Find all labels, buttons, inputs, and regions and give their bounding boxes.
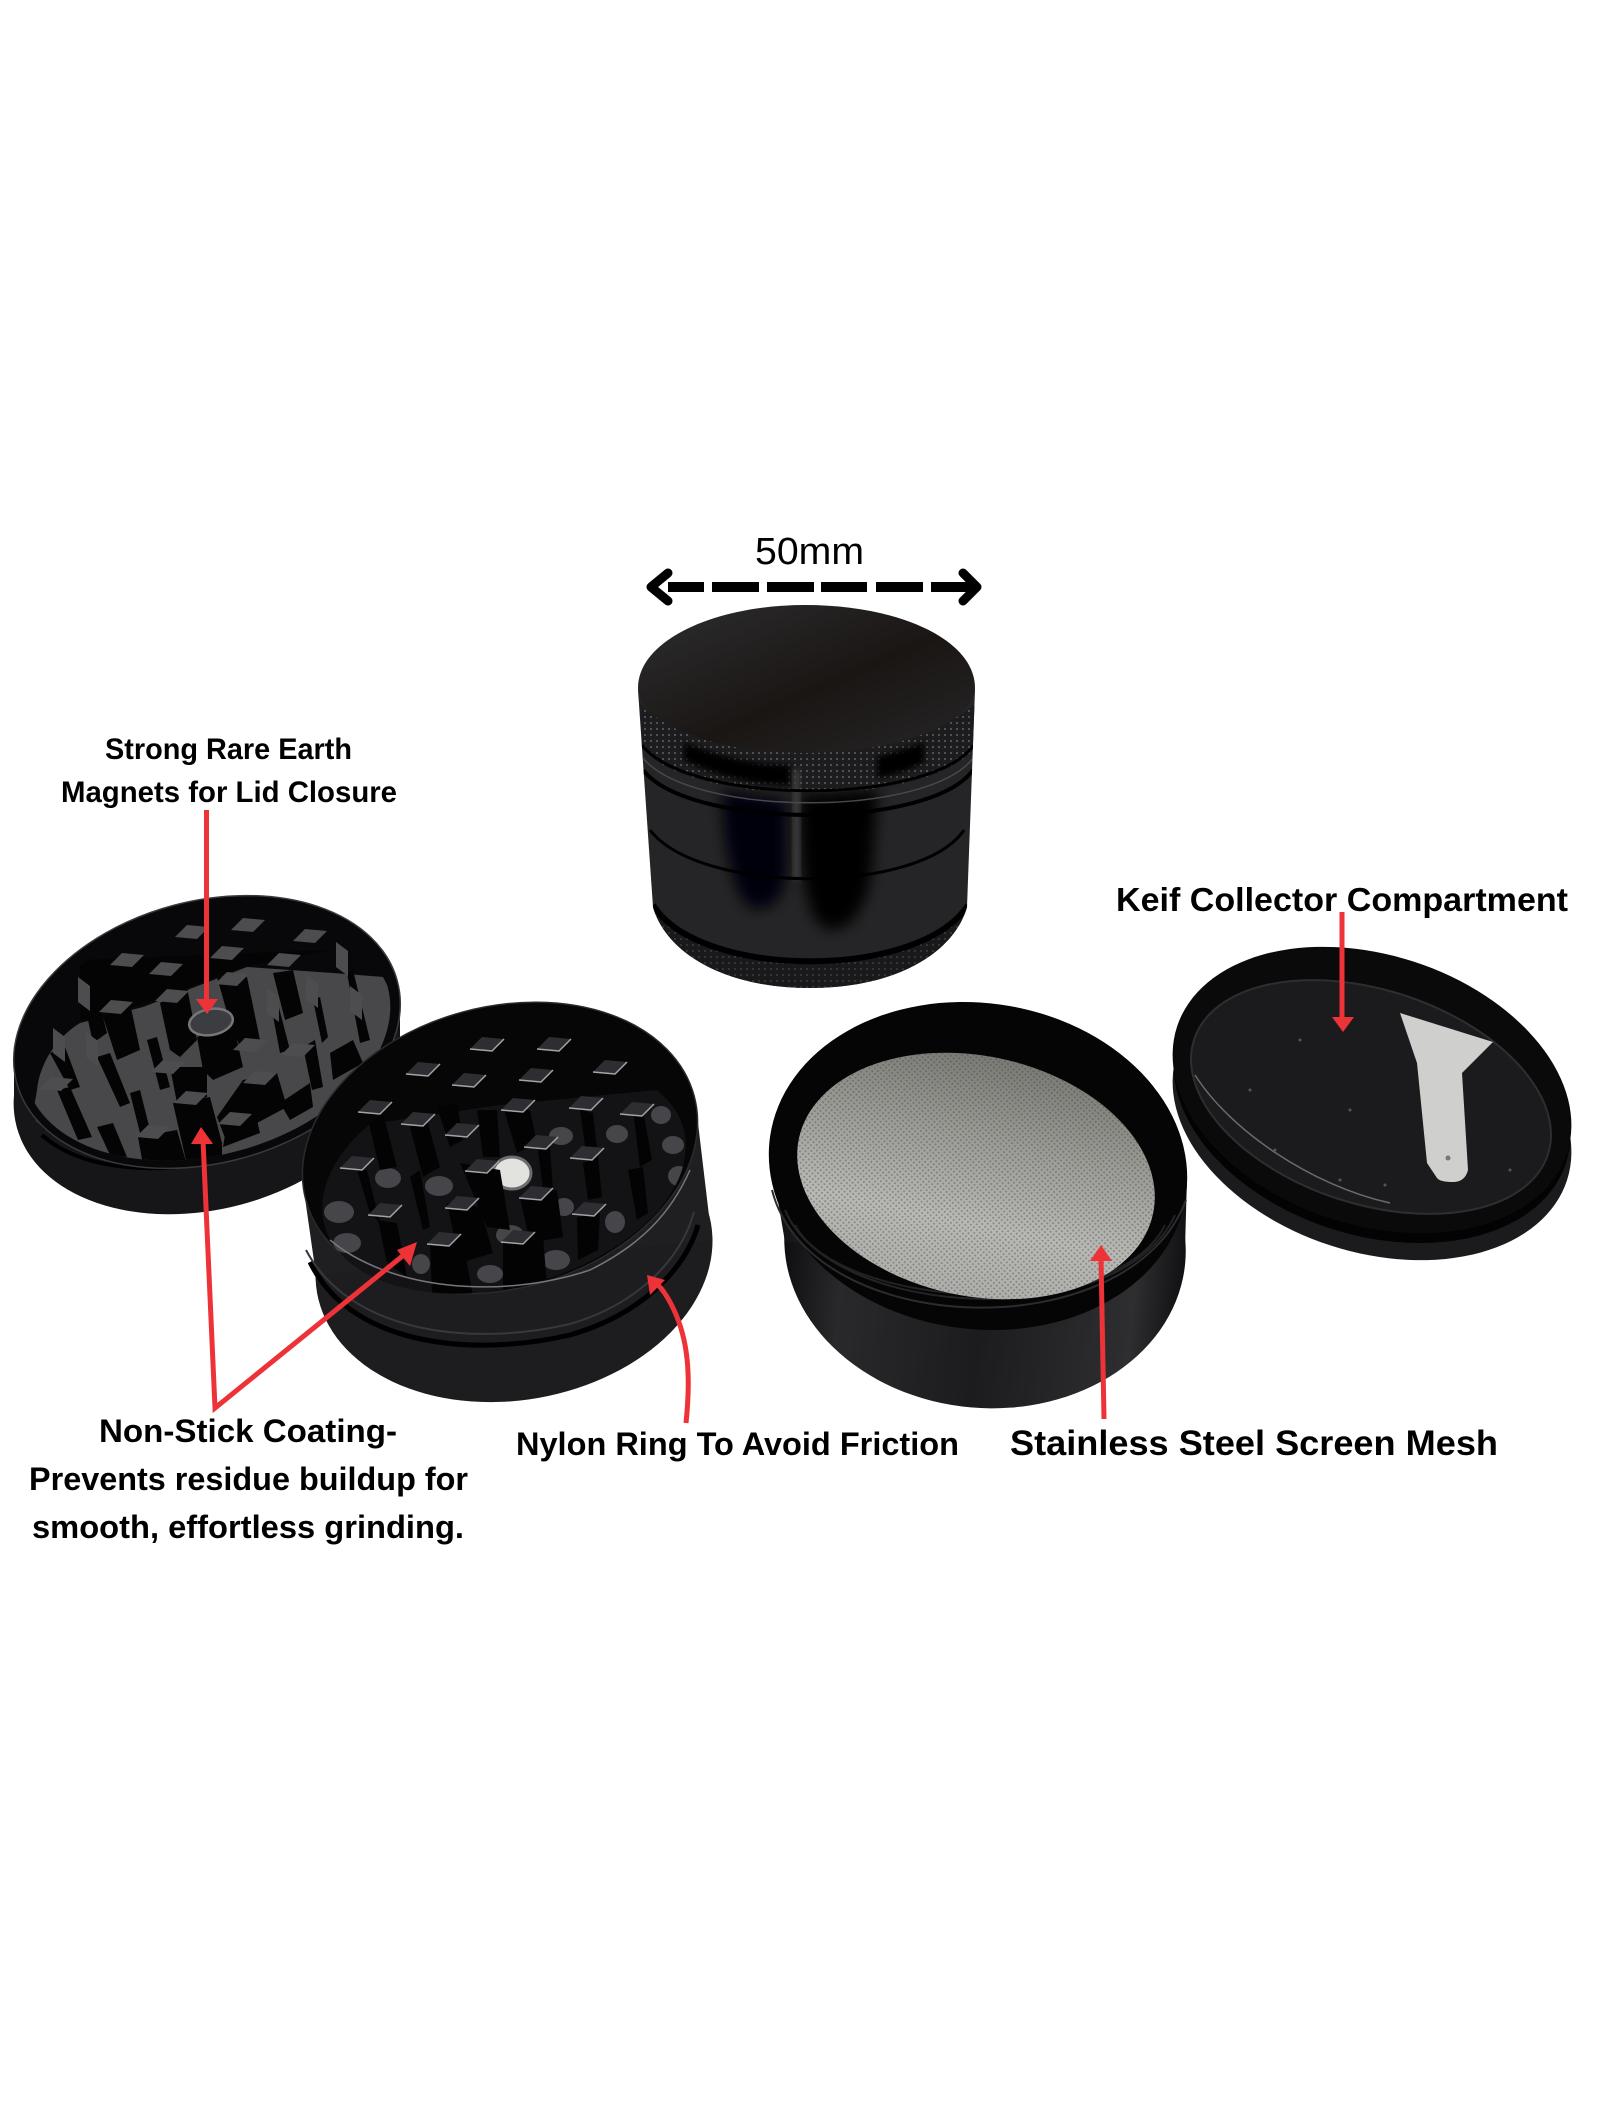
label: non-stick coating: Non-Stick Coating- [99, 1413, 397, 1449]
icon: plastic scoop [1400, 1013, 1493, 1182]
icon: magnet highlight [493, 1157, 531, 1189]
product: screen mesh chamber [747, 975, 1209, 1425]
label: nylon ring: Nylon Ring To Avoid Friction [516, 1426, 959, 1462]
label: non-stick coating [29, 1413, 468, 1545]
product: grinding chamber with teeth [302, 1002, 712, 1402]
label: magnets: Strong Rare Earth [105, 733, 352, 766]
product: magnet lid grinder piece [12, 894, 402, 1214]
dimension label: 50mm: 50mm [755, 531, 864, 573]
arrow: nylon ring [647, 1275, 688, 1423]
label: magnets: Magnets for Lid Closure [61, 776, 397, 809]
label: magnets [61, 733, 397, 809]
arrows: non-stick coating [191, 1127, 417, 1408]
icon: magnet [187, 1005, 235, 1039]
product: closed grinder [638, 605, 975, 990]
arrow: keif compartment [1332, 912, 1354, 1032]
product: keif collector lid [1135, 898, 1600, 1309]
label: mesh screen: Stainless Steel Screen Mesh [1010, 1424, 1498, 1463]
floor and teeth [34, 967, 390, 1161]
label: keif compartment: Keif Collector Compartment [1116, 881, 1568, 918]
floor, holes and teeth [322, 1090, 686, 1294]
arrow: 50mm width dimension [651, 573, 977, 601]
arrow: magnets [196, 810, 218, 1014]
mesh screen [774, 1021, 1178, 1331]
label: non-stick coating: smooth, effortless grinding. [32, 1509, 464, 1545]
label: non-stick coating: Prevents residue buildup for [29, 1461, 468, 1497]
arrow: mesh screen [1090, 1245, 1112, 1419]
